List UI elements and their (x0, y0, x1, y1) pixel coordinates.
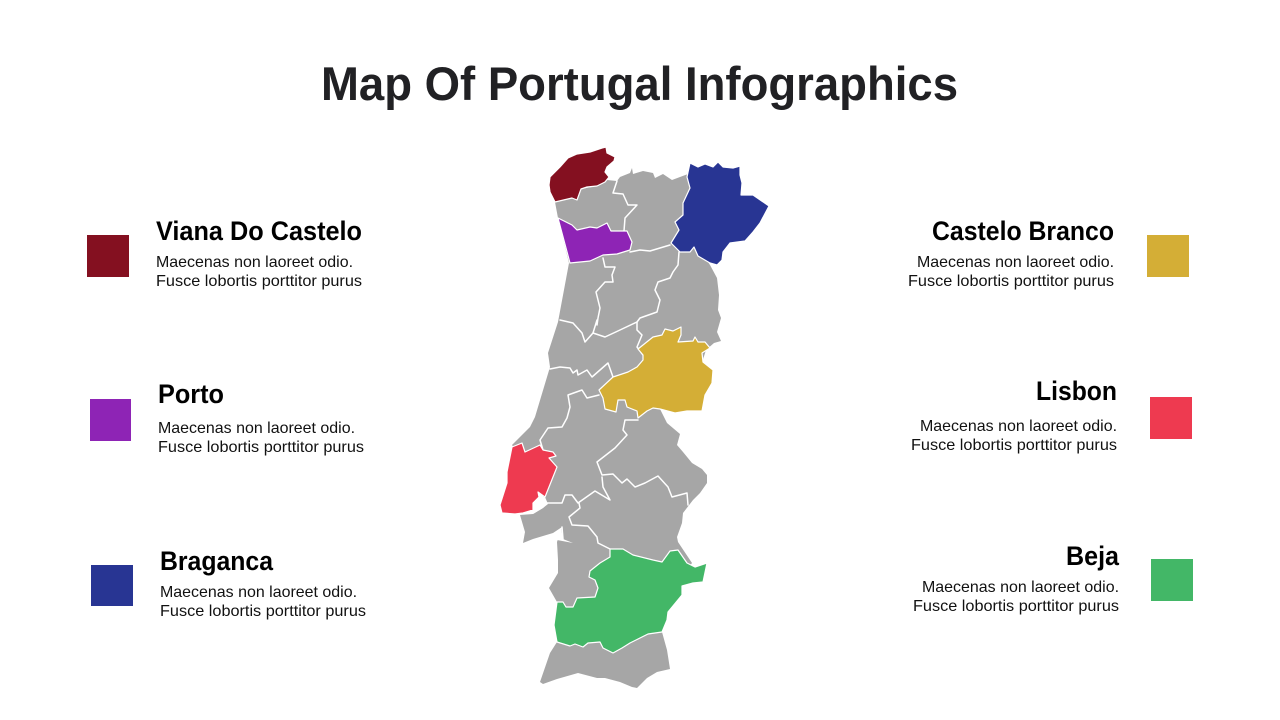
description (911, 418, 1117, 454)
description: Fusce lobortis porttitor purus (156, 273, 362, 290)
region: Porto (558, 218, 632, 263)
swatch (1150, 397, 1192, 439)
item: Braganca (91, 546, 366, 620)
swatch (90, 399, 131, 441)
description: Fusce lobortis porttitor purus (158, 439, 364, 456)
heading: Braganca (160, 546, 274, 576)
item: Viana Do Castelo (87, 216, 362, 290)
heading: Lisbon (1036, 376, 1117, 406)
heading: Porto (158, 379, 224, 409)
swatch (91, 565, 133, 606)
description: Maecenas non laoreet odio. (922, 579, 1119, 596)
description (160, 584, 366, 620)
region: Beja (554, 549, 707, 653)
swatch (1151, 559, 1193, 601)
map of Portugal (500, 147, 769, 688)
description: Fusce lobortis porttitor purus (911, 437, 1117, 454)
description: Fusce lobortis porttitor purus (160, 603, 366, 620)
description: Fusce lobortis porttitor purus (913, 598, 1119, 615)
description (913, 579, 1119, 615)
estuary gaps (533, 497, 548, 514)
district boundaries (540, 181, 688, 549)
swatch (87, 235, 129, 277)
heading: Viana Do Castelo (156, 216, 362, 246)
grey districts (512, 168, 721, 688)
description: Maecenas non laoreet odio. (156, 254, 353, 271)
description: Maecenas non laoreet odio. (160, 584, 357, 601)
region: Braganca (671, 162, 769, 265)
region: Lisbon (500, 443, 557, 514)
description (908, 254, 1114, 290)
region: Castelo Branco (599, 327, 713, 418)
item: Porto (90, 379, 364, 456)
swatch (1147, 235, 1189, 277)
description: Maecenas non laoreet odio. (158, 420, 355, 437)
description: Fusce lobortis porttitor purus (908, 273, 1114, 290)
description (156, 254, 362, 290)
item: Beja (913, 541, 1193, 615)
item: Castelo Branco (908, 216, 1189, 290)
description (158, 420, 364, 456)
heading: Beja (1066, 541, 1120, 571)
region: Viana Do Castelo (549, 147, 615, 202)
title: Map Of Portugal Infographics (321, 57, 958, 110)
item: Lisbon (911, 376, 1192, 454)
description: Maecenas non laoreet odio. (920, 418, 1117, 435)
heading: Castelo Branco (932, 216, 1114, 246)
description: Maecenas non laoreet odio. (917, 254, 1114, 271)
